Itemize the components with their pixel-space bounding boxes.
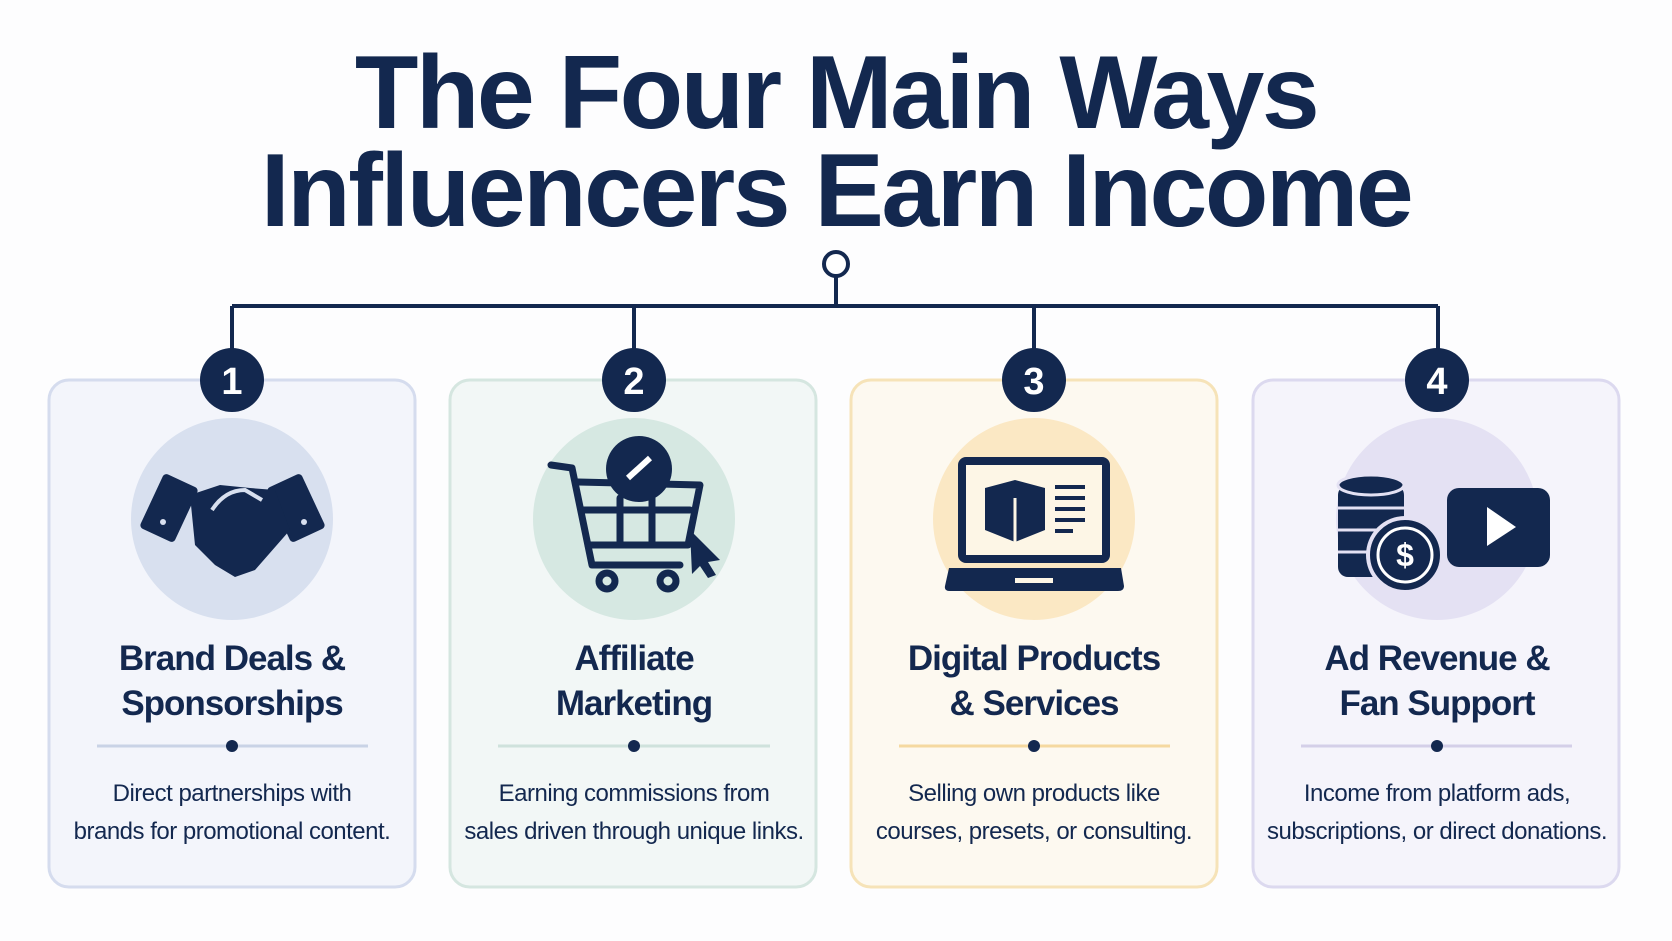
title (261, 35, 1411, 249)
panel: ad revenue: Fan Support (1339, 684, 1536, 723)
panel: affiliate (450, 348, 816, 887)
heading: Brand Deals & (119, 639, 346, 678)
panel: digital products (851, 348, 1217, 887)
panel: affiliate: Marketing (556, 684, 712, 723)
description: Income from platform ads, (1304, 780, 1570, 807)
number badge 2: 2 (623, 361, 645, 403)
icon: laptop (945, 457, 1124, 591)
panel: ad revenue: subscriptions, or direct donations. (1267, 818, 1607, 845)
description: Direct partnerships with (113, 780, 351, 807)
description: Selling own products like (908, 780, 1160, 807)
number badge 4 (1405, 348, 1469, 412)
number badge 3: 3 (1023, 361, 1045, 403)
panel: brand deals (49, 348, 415, 887)
icon: coins and play (1338, 475, 1550, 592)
icon: handshake (139, 473, 326, 577)
heading: Ad Revenue & (1324, 639, 1550, 678)
number badge 4: 4 (1426, 361, 1448, 403)
number badge 3 (1002, 348, 1066, 412)
panel: affiliate: sales driven through unique links. (464, 818, 804, 845)
panel: digital products: courses, presets, or consulting. (876, 818, 1192, 845)
heading: Affiliate (574, 639, 694, 678)
panel: brand deals: brands for promotional content. (74, 818, 390, 845)
connector tree (232, 252, 1438, 350)
number badge 1 (200, 348, 264, 412)
panel: ad revenue (1253, 348, 1619, 887)
heading: Digital Products (908, 639, 1161, 678)
icon: coins and play: $ (1396, 537, 1414, 573)
title: Influencers Earn Income (261, 133, 1411, 249)
title: The Four Main Ways (355, 35, 1317, 151)
panel: brand deals: Sponsorships (121, 684, 343, 723)
icon: cart with link (551, 465, 700, 589)
description: Earning commissions from (499, 780, 769, 807)
panel: digital products: & Services (949, 684, 1119, 723)
number badge 1: 1 (221, 361, 243, 403)
number badge 2 (602, 348, 666, 412)
